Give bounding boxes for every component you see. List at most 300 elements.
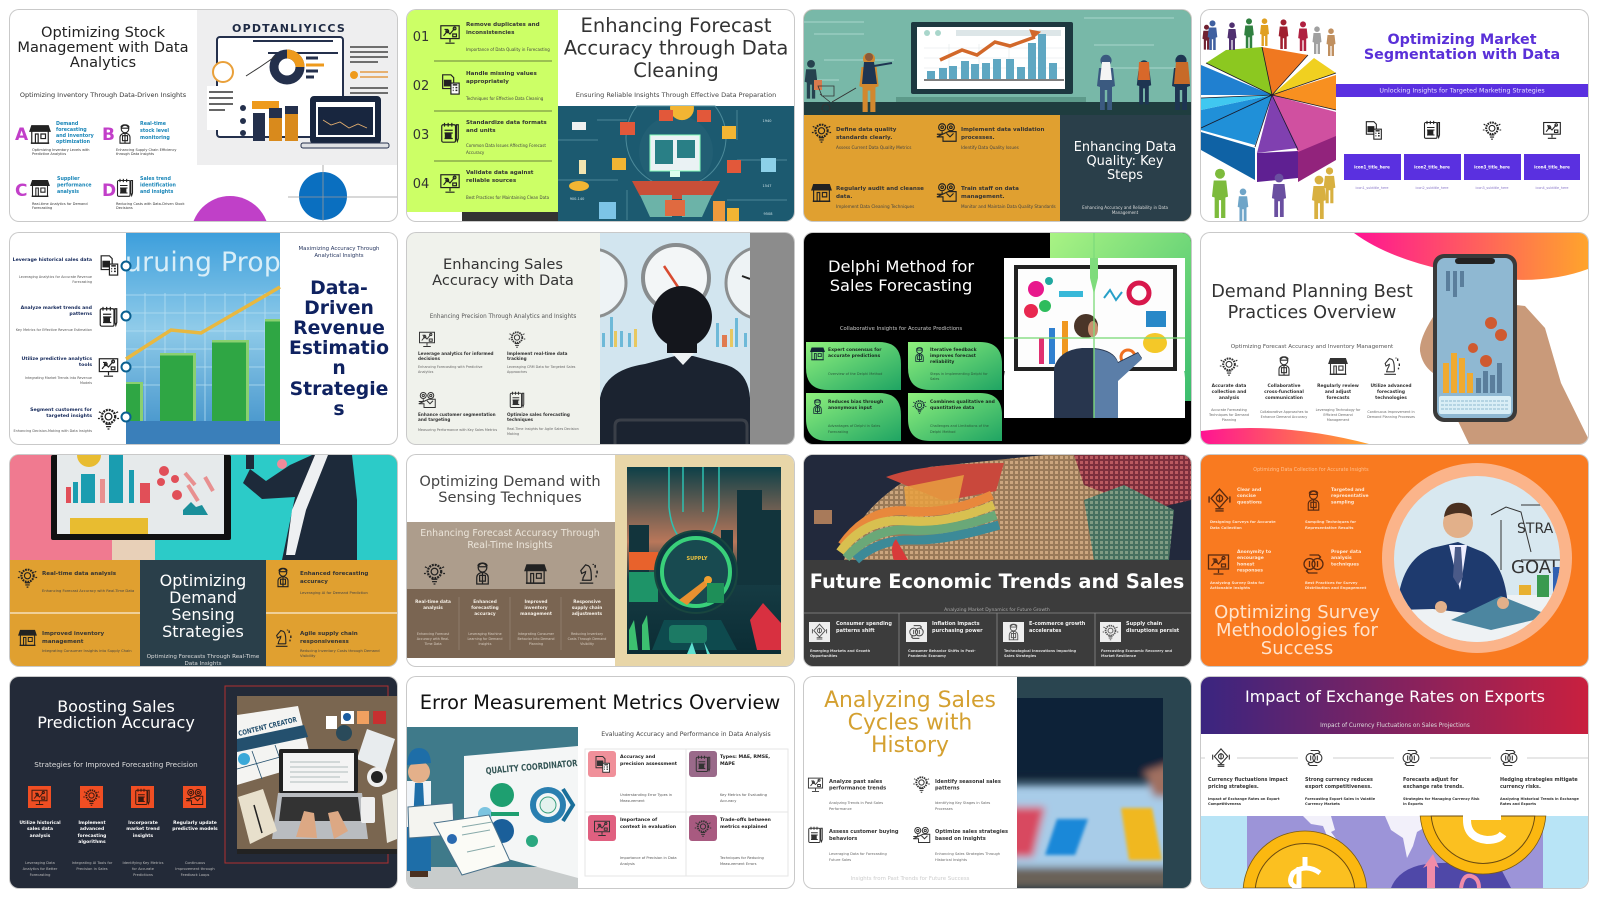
item 2: Representative Results	[1305, 526, 1354, 530]
item 4: Making	[507, 432, 519, 436]
subtitle: Maximizing Accuracy Through	[299, 246, 379, 252]
title panel: Demand	[169, 588, 237, 607]
panel: slide 1 stock management	[10, 10, 397, 221]
card 4: quantitative data	[930, 404, 974, 410]
card 3: icon3_subtitle_here	[1476, 186, 1508, 190]
item: inventory: Integrating Consumer Insights into Supply Chain	[42, 649, 132, 653]
title: Delphi Method for	[828, 256, 974, 276]
item 3: Measuring Performance with Key Sales Metrics	[418, 428, 497, 432]
title: Accuracy through Data	[564, 36, 788, 60]
image: presenter with chart board	[10, 455, 397, 560]
item 2: Targeted and	[1331, 487, 1364, 493]
step 01: Importance of Data Quality in Forecasting	[466, 47, 550, 52]
image: growth bar chart	[125, 232, 281, 444]
brown band with columns: Reducing Inventory	[571, 632, 603, 636]
column 2: Collaborative	[1268, 382, 1300, 388]
card 2: Sales	[930, 376, 939, 380]
subtitle	[299, 246, 379, 258]
card 1: Expert consensus for	[828, 346, 882, 352]
item B: monitoring	[140, 135, 170, 141]
step 2	[1305, 750, 1376, 806]
step 04	[413, 170, 550, 200]
column 2	[72, 786, 113, 871]
item 2: Pandemic Economy	[908, 654, 947, 658]
decorative circles	[191, 165, 397, 274]
step 2: Strong currency reduces	[1305, 777, 1373, 783]
title: Methodologies for	[1216, 620, 1379, 641]
item B: stock level	[140, 128, 169, 134]
card 3: Forecasting	[828, 430, 848, 434]
brown band with columns: forecasting	[471, 605, 499, 611]
item 1: Performance	[829, 807, 853, 811]
item: define standards: Assess Current Data Quality Metrics	[836, 145, 911, 150]
column 4: Utilize advanced	[1370, 382, 1412, 388]
item B: Enhancing Supply Chain Efficiency	[116, 148, 176, 152]
card 4: Combines qualitative and	[930, 398, 995, 404]
metric card 3: context in evaluation	[620, 824, 676, 830]
title	[419, 473, 601, 506]
title panel: Sensing	[171, 605, 235, 624]
image: data network: 1940	[763, 119, 771, 123]
title: Driven	[304, 298, 374, 318]
item 3: encourage	[1237, 555, 1264, 561]
title	[37, 697, 195, 732]
item: predictive tools: Utilize predictive analytics	[22, 356, 92, 362]
item 1: Opportunities	[810, 654, 837, 658]
item 1: Analyzing Trends in Past Sales	[829, 801, 883, 805]
title: Segmentation with Data	[1364, 47, 1560, 63]
metric card 2: Accuracy	[720, 799, 737, 803]
item: inventory: Improved inventory	[42, 631, 105, 637]
item 1: patterns shift	[836, 628, 875, 634]
metric card 4: Trade-offs between	[720, 817, 771, 823]
brown band with columns: Improved	[524, 599, 548, 605]
image: businessman in circle: GOAL	[1511, 557, 1561, 578]
item: inventory: management	[42, 639, 84, 645]
item: train staff: management.	[961, 194, 1005, 200]
card 2: reliability	[930, 358, 954, 364]
step 04: Validate data against	[466, 170, 534, 176]
panel: slide 10 demand with sensing	[407, 455, 794, 666]
title panel	[1060, 115, 1191, 221]
item 3: Analyzing Survey Data for	[1210, 581, 1265, 585]
title: Enhancing Forecast	[581, 14, 772, 37]
title: Practices Overview	[1228, 302, 1396, 322]
item C: analysis	[57, 189, 79, 195]
metric card 2: MAPE	[720, 761, 735, 767]
subtitle: Ensuring Reliable Insights Through Effective Data Preparation	[576, 91, 776, 99]
item 4: based on insights	[935, 836, 986, 842]
item 3: Actionable Insights	[1210, 586, 1251, 590]
title: s	[333, 398, 345, 420]
item 3: behaviors	[829, 836, 857, 842]
column 1: Leveraging Data	[25, 861, 55, 865]
image: desk with laptop in red frame: CONTENT CREATOR	[238, 716, 298, 738]
column 1: Accurate Forecasting	[1211, 408, 1247, 412]
brown band with columns: Insights	[479, 642, 492, 646]
item: market trends	[16, 304, 130, 332]
title	[824, 688, 996, 758]
title: Cleaning	[633, 59, 719, 82]
column 1	[1208, 358, 1249, 422]
column 4: forecasting	[1377, 388, 1405, 394]
item: real-time data	[18, 570, 134, 593]
brown band with columns: Costs Through Demand	[568, 637, 606, 641]
card 3: Advantages of Delphi in Sales	[828, 424, 880, 428]
column 3: market trend	[126, 826, 160, 832]
item 1: Leverage analytics for informed	[418, 350, 494, 356]
item 4: Enhancing Sales Strategies Through	[935, 852, 1000, 856]
title	[289, 278, 389, 420]
item: validation	[937, 124, 1044, 150]
image: hand holding phone	[1420, 254, 1588, 444]
subtitle band	[1336, 84, 1588, 97]
item 2: Identifying Key Stages in Sales	[935, 801, 990, 805]
item: market trends: Key Metrics for Effective Revenue Estimation	[16, 328, 92, 332]
title: Optimizing Demand with	[419, 473, 601, 490]
item 4: Real-Time Insights for Agile Sales Decision	[507, 426, 579, 430]
column 3: insights	[133, 833, 153, 839]
step 2: export competitiveness.	[1305, 784, 1372, 790]
image: desk with laptop in red frame	[225, 686, 397, 863]
image: quality coordinator certificate	[407, 727, 578, 888]
item 4	[507, 391, 579, 436]
title panel: Enhancing Accuracy and Reliability in Data	[1082, 205, 1168, 210]
subtitle: Strategies for Improved Forecasting Precision	[34, 760, 198, 769]
step 4	[1500, 750, 1579, 806]
item 2: representative	[1331, 493, 1369, 499]
subtitle: Optimizing Data Collection for Accurate Insights	[1253, 467, 1369, 473]
image: businessman in circle	[1382, 463, 1572, 653]
image: analytics dashboard: OPDTANLIYICCS	[232, 22, 346, 35]
item D: Decisions	[116, 206, 133, 210]
brown band with columns: Responsive	[573, 599, 601, 605]
item 3: Future Sales	[829, 858, 851, 862]
brown band with columns: Behavior into Demand	[517, 637, 555, 641]
item C: Real-time Analytics for Demand	[32, 202, 88, 206]
item 1: Consumer spending	[836, 621, 892, 627]
item: market trends: patterns	[69, 310, 92, 316]
item 4: Optimize sales forecasting	[507, 412, 570, 416]
step 3: in Exports	[1403, 802, 1423, 806]
title: Boosting Sales	[57, 697, 175, 716]
item: segmentation: Segment customers for	[30, 406, 93, 412]
item B: through Data Insights	[116, 152, 154, 156]
column 1	[19, 786, 61, 877]
item D: Reducing Costs with Data-Driven Stock	[116, 202, 186, 206]
item: agile: Visibility	[300, 654, 316, 658]
item 2: Implement real-time data	[507, 350, 568, 356]
item 3: Enhance customer segmentation	[418, 412, 496, 416]
header band	[1201, 677, 1588, 734]
item 2: Identify seasonal sales	[935, 779, 1001, 785]
panel: slide 15 sales cycles	[804, 677, 1191, 888]
card 2	[1404, 121, 1461, 190]
step 1: Impact of Exchange Rates on Export	[1208, 797, 1280, 801]
column 4: Continuous	[185, 861, 205, 865]
item: predictive tools: Integrating Market Trends into Revenue	[25, 376, 92, 380]
column 4: Improvement through	[175, 867, 215, 871]
column 1: sales data	[27, 826, 53, 832]
item C	[15, 176, 92, 210]
item 2: purchasing power	[932, 628, 983, 634]
step 02: 02	[413, 79, 429, 94]
column 4: Demand Planning Processes	[1367, 414, 1415, 418]
image: data network	[558, 106, 794, 221]
item: segmentation: Enhancing Decision-Making with Data Insights	[14, 428, 92, 432]
lime side panel	[407, 10, 558, 221]
metric card 1: Measurement	[620, 799, 645, 803]
title	[1211, 282, 1413, 322]
step 3: exchange rate trends.	[1403, 784, 1464, 790]
card 4: Delphi Method	[930, 430, 955, 434]
item: audit	[812, 185, 924, 209]
item B: Real-time	[140, 121, 167, 127]
step 01	[413, 22, 550, 52]
step 02: Handle missing values	[466, 71, 537, 77]
item: train staff	[937, 184, 1056, 209]
item: audit: data.	[836, 194, 852, 200]
image: data network: 900-140	[570, 197, 584, 201]
item: define standards	[812, 125, 911, 150]
item 1	[809, 621, 892, 658]
decorative gradient blobs	[1201, 232, 1588, 444]
panel: slide 2 forecast accuracy	[407, 10, 794, 221]
title panel: Optimizing Forecasts Through Real-Time	[147, 654, 260, 660]
card 2: Iterative feedback	[930, 346, 978, 352]
brown band with columns: management	[520, 611, 552, 617]
title	[564, 14, 788, 82]
metric card 1	[588, 751, 678, 803]
item 3: responses	[1237, 568, 1263, 574]
title: Estimatio	[289, 338, 389, 358]
step 4: Hedging strategies mitigate	[1500, 777, 1578, 783]
item 4: techniques	[507, 416, 534, 422]
metric card 2: Types: MAE, RMSE,	[720, 754, 770, 760]
column 1: Utilize historical	[19, 820, 61, 826]
item 2: Inflation impacts	[932, 621, 980, 627]
item 1: questions	[1237, 500, 1262, 506]
panel: slide 13 sales prediction	[10, 677, 397, 888]
item 2: tracking	[507, 356, 527, 360]
item 4: Forecasting Economic Recovery and	[1101, 649, 1173, 653]
title: Strategie	[290, 378, 388, 400]
brown band with columns: adjustments	[572, 611, 603, 617]
item 1	[808, 778, 886, 811]
card 1: icon1_title_here	[1354, 164, 1390, 170]
item: define standards: Define data quality	[836, 127, 897, 133]
column 2: advanced	[80, 826, 104, 832]
metric card 1: Understanding Error Types in	[620, 793, 672, 797]
item: define standards: standards clearly.	[836, 135, 892, 141]
subtitle: Analyzing Market Dynamics for Future Growth	[944, 607, 1050, 613]
footer: Insights from Past Trends for Future Success	[851, 876, 970, 882]
step 03: 03	[413, 128, 429, 143]
step 03	[413, 120, 547, 155]
card 3	[1464, 122, 1521, 190]
card 1: icon1_subtitle_here	[1356, 186, 1388, 190]
column 4: Feedback Loops	[181, 873, 209, 877]
item 3	[418, 392, 497, 432]
step 03: Accuracy	[466, 150, 485, 155]
metric card 3: Analysis	[620, 862, 635, 866]
card 1: Overview of the Delphi Method	[828, 372, 882, 376]
card 1	[1344, 122, 1401, 190]
item 4	[1304, 549, 1367, 590]
column 2: cross-functional	[1264, 388, 1304, 394]
column 1: analysis	[1219, 394, 1239, 400]
item: forecasting	[278, 568, 369, 595]
title: Cycles with	[848, 710, 972, 736]
image: blurred tablet photo	[1009, 677, 1191, 888]
brown band with columns	[407, 589, 615, 658]
step 02: Techniques for Effective Data Cleaning	[465, 96, 544, 101]
step 02: appropriately	[466, 79, 509, 85]
brown band with columns: Leveraging Machine	[468, 632, 502, 636]
column 3: Efficient Demand	[1323, 412, 1353, 416]
item: agile: responsiveness	[300, 639, 350, 645]
item 2: Leveraging CRM Data for Targeted Sales	[507, 364, 576, 368]
item A: Demand	[56, 121, 79, 127]
item: audit: Implement Data Cleaning Techniques	[836, 204, 914, 209]
column 2: forecasting	[78, 833, 106, 839]
step 04: 04	[413, 177, 429, 192]
metric card 1: precision assessment	[620, 761, 678, 767]
title panel: Strategies	[162, 622, 244, 641]
step 04: reliable sources	[466, 178, 517, 184]
title: Management with Data	[17, 39, 189, 56]
item 2: Sampling Techniques for	[1305, 520, 1356, 524]
column 2: Precision in Sales	[76, 867, 108, 871]
step 01: inconsistencies	[466, 30, 515, 36]
column 2: Collaborative Approaches to	[1260, 410, 1308, 414]
image: analytics dashboard	[197, 10, 397, 165]
item: agile	[276, 630, 380, 658]
subtitle: Collaborative Insights for Accurate Predictions	[840, 326, 962, 332]
metric card 2: Key Metrics for Evaluating	[720, 793, 767, 797]
brown band with columns: accuracy	[474, 611, 496, 617]
item: real-time data: Enhancing Forecast Accuracy with Real-Time Data	[42, 589, 134, 593]
title: Accuracy with Data	[432, 272, 574, 288]
brown band with columns: Visibility	[580, 642, 594, 646]
step 1: pricing strategies.	[1208, 784, 1259, 790]
metric card 4	[689, 815, 771, 866]
item: segmentation	[14, 406, 130, 432]
item 4: Supply chain	[1126, 621, 1163, 627]
item: segmentation: targeted insights	[46, 412, 92, 418]
title: Prediction Accuracy	[37, 713, 195, 732]
item D: Sales trend	[140, 176, 171, 182]
item: forecasting: accuracy	[300, 579, 328, 585]
item 2	[1305, 487, 1369, 530]
item: historical sales: Forecasting	[72, 280, 92, 284]
metric card 4: metrics explained	[720, 824, 767, 830]
title panel: Quality: Key	[1087, 154, 1164, 169]
column 2: Integrating AI Tools for	[72, 861, 113, 865]
item 3: Technological Innovations Impacting	[1004, 649, 1077, 653]
title: Sales Forecasting	[830, 276, 972, 294]
column 1: Techniques for Demand	[1208, 412, 1249, 416]
tan band	[407, 522, 615, 589]
item B	[102, 121, 176, 156]
panel: slide 4 market segmentation	[1201, 10, 1588, 221]
header band: Impact of Exchange Rates on Exports	[1245, 687, 1545, 706]
card 4: icon4_subtitle_here	[1536, 186, 1568, 190]
item 1	[418, 332, 494, 374]
step 3: Forecasts adjust for	[1403, 777, 1459, 783]
item 4: analysis	[1331, 555, 1352, 561]
item 4: Proper data	[1331, 549, 1361, 555]
metric card 3	[588, 815, 677, 866]
title	[1214, 602, 1380, 659]
item: agile: Reducing Inventory Costs through Demand	[300, 649, 380, 653]
column 3: Predictions	[133, 873, 153, 877]
item 1: Enhancing Forecasting with Predictive	[418, 364, 483, 368]
item C: performance	[57, 182, 92, 188]
item D: and insights	[140, 189, 173, 195]
panel: slide 8 demand planning	[1201, 232, 1588, 444]
title	[1364, 32, 1560, 63]
item 1: Analyze past sales	[829, 779, 882, 785]
item: historical sales: Leveraging Analytics for Accurate Revenue	[19, 274, 92, 278]
item 2: Approaches	[507, 370, 527, 374]
image: sales monitor with people	[804, 10, 1191, 115]
item 4: disruptions persist	[1126, 628, 1180, 634]
subtitle band: Unlocking Insights for Targeted Marketing Strategies	[1379, 88, 1545, 94]
card 3: Reduces bias through	[828, 398, 883, 404]
item 3	[1003, 621, 1086, 658]
item 1: concise	[1237, 493, 1256, 499]
item A: Optimizing Inventory Levels with	[32, 148, 90, 152]
subtitle: Enhancing Precision Through Analytics and Insights	[430, 314, 576, 320]
item: validation: Identify Data Quality Issues	[961, 145, 1019, 150]
item A	[15, 121, 95, 156]
step 01: 01	[413, 30, 429, 45]
item: real-time data: Real-time data analysis	[42, 571, 117, 577]
image: presenter at whiteboard in clover mask	[1004, 232, 1191, 418]
step 02	[413, 71, 544, 101]
panel: slide 12 survey methodologies	[1201, 455, 1588, 666]
item: agile: Agile supply chain	[300, 631, 358, 637]
brown band with columns: supply chain	[572, 605, 602, 611]
card 1: accurate predictions	[828, 352, 881, 358]
item 2: Consumer Behavior Shifts in Post-	[908, 649, 976, 653]
tan band: Enhancing Forecast Accuracy Through	[420, 528, 600, 539]
image: futuristic supply gauge: SUPPLY	[686, 556, 708, 562]
brown band with columns: analysis	[423, 605, 443, 611]
item A: and inventory	[56, 133, 95, 139]
title: n	[332, 358, 346, 378]
step 4: currency risks.	[1500, 784, 1541, 790]
column 1: analysis	[30, 833, 51, 839]
panel: slide 7 delphi method	[804, 232, 1191, 444]
step 4: Rates and Exports	[1500, 802, 1536, 806]
item A: forecasting	[56, 127, 87, 133]
item 1: Clear and	[1237, 487, 1261, 493]
item: market trends: Analyze market trends and	[21, 304, 92, 310]
item: validation: Implement data validation	[961, 127, 1044, 133]
panel: slide 6 sales accuracy	[407, 232, 794, 444]
item 4: techniques	[1331, 562, 1359, 568]
column 4	[172, 786, 218, 877]
item 1: Designing Surveys for Accurate	[1210, 520, 1276, 524]
panel: slide 11 future economic trends	[804, 455, 1191, 666]
card 1	[806, 342, 901, 390]
item 1	[1209, 487, 1276, 530]
card 4: icon4_title_here	[1534, 164, 1570, 170]
column 1: Forecasting	[30, 873, 50, 877]
column 4: Continuous Improvement in	[1367, 410, 1415, 414]
